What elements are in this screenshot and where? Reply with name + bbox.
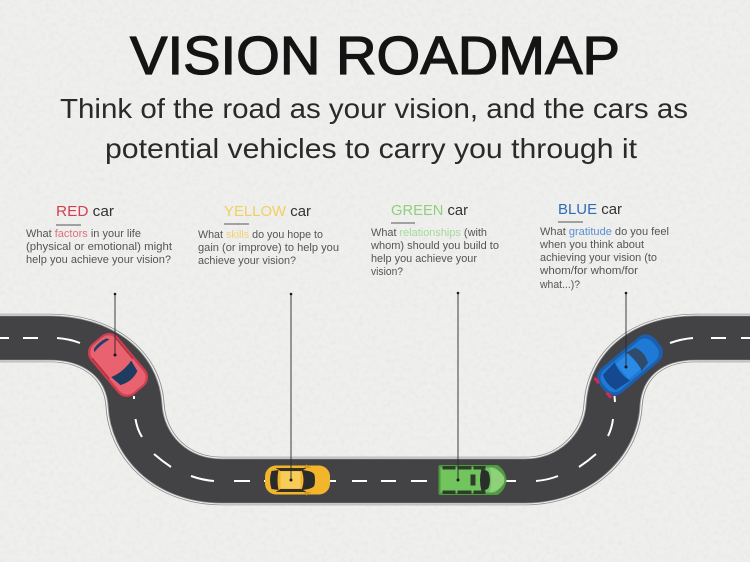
text: blue question: what...)?	[539, 279, 580, 291]
pointer: blue car	[624, 292, 628, 368]
text: green question: What relationships (with	[371, 227, 487, 239]
heading: green car: GREEN car	[391, 202, 468, 219]
heading: yellow car: YELLOW car	[224, 203, 311, 220]
road centre dashes	[0, 338, 750, 481]
panel: red car question	[26, 203, 172, 266]
text: blue question: when you think about	[539, 239, 644, 251]
text: red question: (physical or emotional) might	[26, 241, 172, 253]
text: blue question: achieving your vision (to	[540, 252, 657, 264]
title: VISION ROADMAP	[130, 26, 620, 86]
text: blue question: whom/for whom/for	[539, 265, 638, 277]
text: green question: help you achieve your	[371, 253, 477, 265]
text: green question: vision?	[371, 266, 403, 278]
pointer: yellow car	[290, 293, 292, 482]
text: red question: What factors in your life	[26, 228, 141, 240]
text: red question: help you achieve your vision?	[26, 254, 171, 266]
text: green question: whom) should you build to	[370, 240, 499, 252]
heading: red car: RED car	[56, 203, 114, 220]
text: yellow question	[198, 229, 339, 267]
text: yellow question: What skills do you hope to	[198, 229, 323, 241]
subtitle: Think of the road as your vision, and the cars as	[60, 93, 688, 124]
icon: yellow car	[265, 464, 330, 496]
text: blue question: What gratitude do you feel	[540, 226, 669, 238]
icon: green car	[438, 465, 506, 495]
text: green question	[370, 227, 499, 278]
icon: blue car	[591, 330, 668, 401]
panel: yellow car question	[198, 203, 339, 267]
text: blue question	[539, 226, 669, 291]
road	[0, 338, 750, 481]
pointer: green car	[456, 292, 460, 482]
subtitle: potential vehicles to carry you through it	[105, 133, 637, 164]
icon: red car	[83, 328, 153, 402]
text: yellow question: gain (or improve) to help you	[198, 242, 339, 254]
subtitle	[60, 93, 688, 164]
panel: green car question	[370, 202, 499, 278]
panel: blue car question	[539, 201, 669, 291]
text: yellow question: achieve your vision?	[198, 255, 296, 267]
text: red question	[26, 228, 172, 266]
heading: blue car: BLUE car	[558, 201, 622, 218]
pointer: red car	[114, 293, 116, 356]
